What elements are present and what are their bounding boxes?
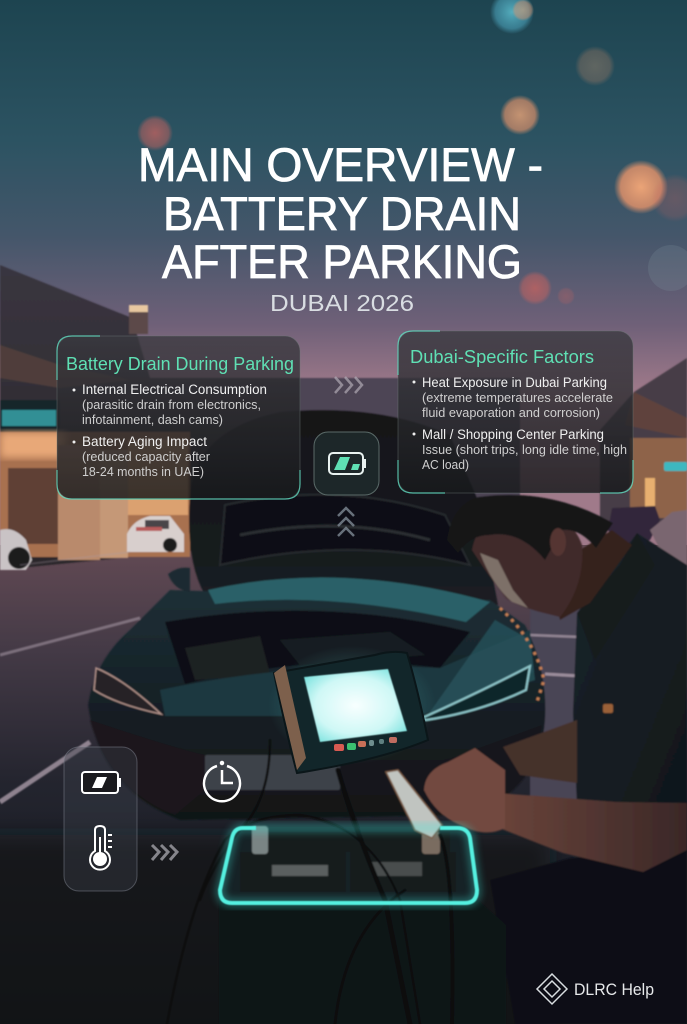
icon: battery badge bbox=[314, 432, 379, 495]
logo: DLRC Help: DLRC Help bbox=[574, 980, 654, 999]
technician: near forearm bbox=[497, 793, 687, 872]
car: hood front edge bbox=[160, 630, 534, 716]
bullet list: AC load) bbox=[422, 457, 469, 472]
technician: ear bbox=[550, 528, 566, 556]
icon: thermometer bbox=[90, 826, 112, 870]
bullet list: (extreme temperatures accelerate bbox=[422, 390, 613, 405]
arrows: top chevrons bbox=[335, 377, 362, 393]
icon: battery bbox=[82, 772, 121, 793]
bullet list: Mall / Shopping Center Parking bbox=[422, 427, 604, 442]
tablet: body bbox=[274, 652, 428, 773]
technician: trousers bbox=[490, 850, 687, 1024]
title: BATTERY DRAIN bbox=[163, 187, 521, 240]
icon: clock bbox=[204, 762, 240, 801]
title: AFTER PARKING bbox=[162, 235, 522, 288]
car: engine bay bbox=[165, 611, 470, 684]
technician: face light bbox=[480, 553, 528, 608]
parking lines bbox=[0, 552, 580, 802]
bullet list: infotainment, dash cams) bbox=[82, 412, 223, 427]
technician: shirt bbox=[573, 533, 687, 810]
distant building band bbox=[290, 378, 520, 508]
arrows: up chevrons bbox=[338, 508, 354, 536]
logo: DLRC Help bbox=[537, 974, 654, 1004]
technician: upper forearm bbox=[503, 720, 577, 783]
heading: Battery Drain During Parking bbox=[66, 354, 294, 374]
panel: status icons bbox=[64, 747, 137, 891]
bullet list: Heat Exposure in Dubai Parking bbox=[422, 375, 607, 390]
title: MAIN OVERVIEW - bbox=[138, 138, 543, 191]
bullet list: Internal Electrical Consumption bbox=[82, 382, 267, 397]
clamp bbox=[386, 770, 442, 838]
panel: battery drain during parking bbox=[57, 336, 300, 499]
background: parking ground bbox=[0, 545, 687, 1024]
tablet: buttons bbox=[334, 737, 397, 751]
tablet: side grip bbox=[274, 665, 306, 770]
car: front body bbox=[88, 590, 545, 820]
battery: terminals bbox=[252, 826, 268, 854]
car: licence plate bbox=[205, 755, 340, 790]
technician: head bbox=[472, 510, 582, 617]
foreground shadow bbox=[0, 835, 550, 1024]
bullet list bbox=[72, 382, 267, 479]
technician: collar bbox=[577, 533, 655, 660]
car: left headlight bbox=[94, 668, 161, 714]
bullet list: Battery Aging Impact bbox=[82, 434, 207, 449]
car: windscreen reflection bbox=[208, 578, 490, 622]
left mall building bbox=[0, 265, 300, 570]
title bbox=[138, 138, 543, 288]
arrows: lower chevrons bbox=[152, 845, 177, 860]
bullet list: (parasitic drain from electronics, bbox=[82, 397, 261, 412]
bullet list bbox=[412, 375, 627, 472]
car: warm edge lights bbox=[500, 608, 544, 705]
car-park surface between car and man bbox=[530, 590, 590, 830]
car: lower bumper bbox=[90, 720, 205, 815]
tablet: glow bbox=[267, 645, 437, 765]
panel: dubai-specific factors bbox=[398, 331, 633, 493]
car: right headlight bbox=[422, 666, 530, 720]
battery: glow ring bbox=[220, 828, 477, 903]
car: right fender sheen bbox=[428, 620, 535, 715]
subtitle: DUBAI 2026 bbox=[270, 290, 414, 316]
technician: hair bbox=[447, 495, 613, 560]
bullet list: (reduced capacity after bbox=[82, 449, 211, 464]
photographic scene bbox=[0, 265, 687, 1024]
tablet: screen bbox=[304, 669, 407, 742]
right mall building bbox=[600, 358, 687, 530]
car: open hood bbox=[189, 410, 498, 605]
heading: Dubai-Specific Factors bbox=[410, 347, 594, 367]
bokeh lights bbox=[137, 0, 687, 305]
technician: neck bbox=[548, 530, 632, 620]
battery box bbox=[219, 826, 506, 1024]
bullet list: fluid evaporation and corrosion) bbox=[422, 405, 600, 420]
technician: hand bbox=[424, 748, 505, 832]
bullet list: 18-24 months in UAE) bbox=[82, 464, 204, 479]
technician: pocket tag bbox=[603, 704, 613, 713]
cables bbox=[167, 740, 452, 1024]
car bbox=[88, 410, 545, 820]
diagnostic tablet bbox=[267, 645, 437, 773]
car: side mirror bbox=[168, 568, 190, 592]
technician bbox=[447, 495, 687, 1024]
bullet list: Issue (short trips, long idle time, high bbox=[422, 442, 627, 457]
background parked cars bbox=[0, 506, 687, 570]
background: dusk sky bbox=[0, 0, 687, 560]
